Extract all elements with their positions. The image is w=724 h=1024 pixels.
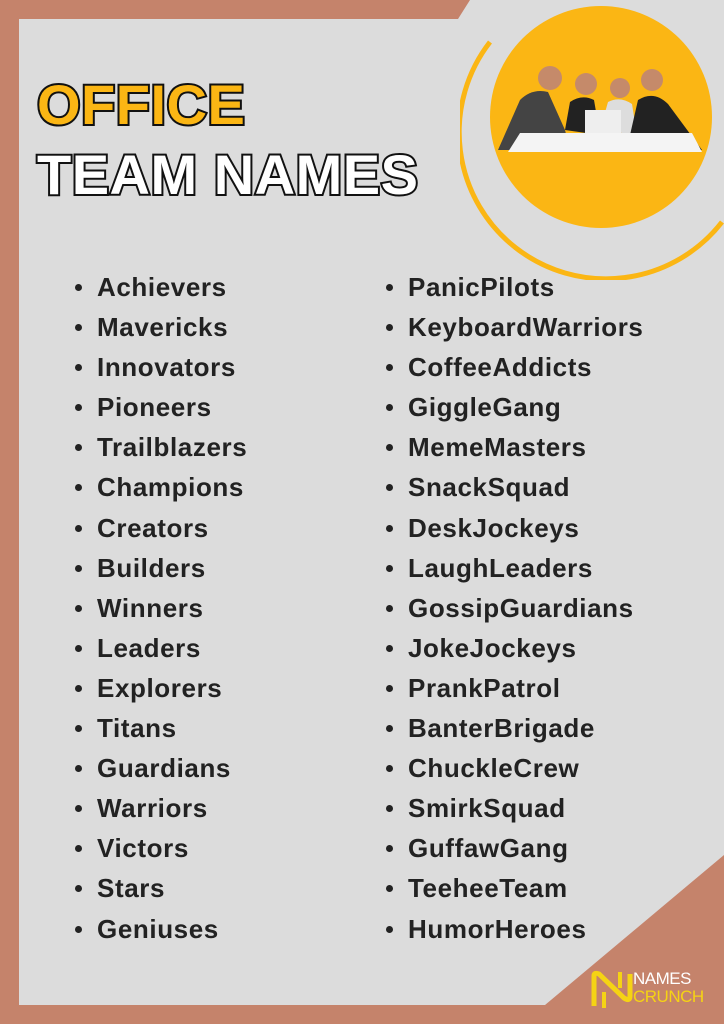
list: column 1: Pioneers [97,392,212,422]
list: column 1: Winners [97,593,204,623]
arc ring [459,42,722,279]
list: column 1: Mavericks [97,312,228,342]
list: column 2: LaughLeaders [408,553,593,583]
list: column 2: BanterBrigade [408,713,595,743]
list: column 1: Stars [97,873,165,903]
list: column 2: ChuckleCrew [408,753,579,783]
people [498,66,702,152]
list: column 2: DeskJockeys [408,513,579,543]
list: column 2: CoffeeAddicts [408,352,592,382]
title [36,73,418,206]
list: column 1: Victors [97,833,189,863]
list: column 2: KeyboardWarriors [408,312,643,342]
list: column 2: GiggleGang [408,392,561,422]
list: column 2: GossipGuardians [408,593,634,623]
list: column 2: HumorHeroes [408,914,587,944]
title: OFFICE [37,73,245,136]
title: TEAM NAMES [37,143,418,206]
list: column 1: Explorers [97,673,222,703]
list: column 1: Guardians [97,753,231,783]
list: column 2: MemeMasters [408,432,587,462]
list: column 1: Champions [97,472,244,502]
list: column 1: Achievers [97,272,227,302]
list: column 1: Leaders [97,633,201,663]
photo circle [460,6,724,280]
list: column 1: Builders [97,553,206,583]
list: column 1: Creators [97,513,209,543]
list: column 1: Titans [97,713,177,743]
list: column 2: GuffawGang [408,833,569,863]
list: column 2: PanicPilots [408,272,555,302]
list: column 1: Geniuses [97,914,219,944]
list: column 1: Warriors [97,793,208,823]
list: column 2: SnackSquad [408,472,570,502]
list: column 1 [75,272,247,944]
logo: CRUNCH [633,987,704,1006]
list: column 1: Trailblazers [97,432,247,462]
list: column 1: Innovators [97,352,236,382]
list: column 2: TeeheeTeam [408,873,568,903]
logo: NAMES [633,969,691,988]
logo [592,969,704,1008]
list: column 2 [386,272,643,944]
list: column 2: PrankPatrol [408,673,561,703]
list: column 2: SmirkSquad [408,793,566,823]
list: column 2: JokeJockeys [408,633,577,663]
